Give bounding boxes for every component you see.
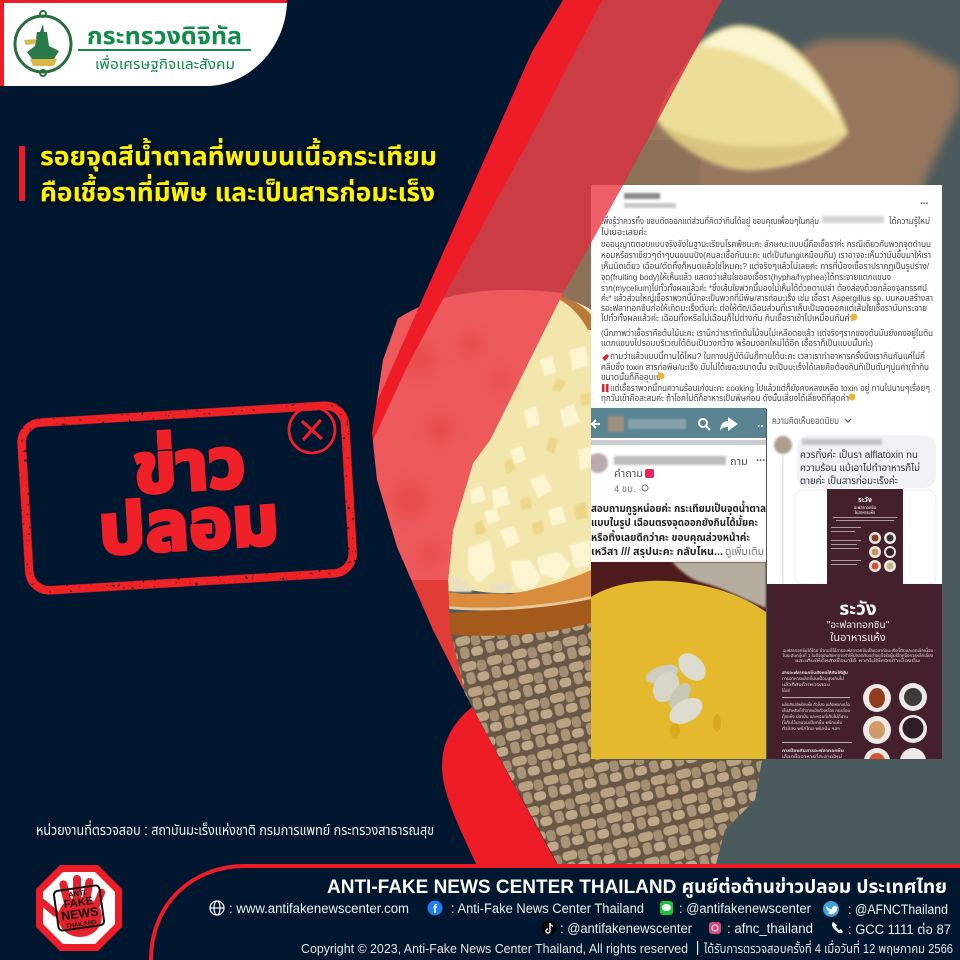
panel: navy background [0, 0, 563, 960]
poster small text: กุ้งแห้ง ปลาป่น และหอมที่เก็บไม่ดีนาน [782, 713, 848, 720]
post body text: ค่ะ* แล้วส่วนใหญ่เชื้อราพวกนี้มักจะเป็นพวกที่มีพิษ/สารก่อมะเร็ง เช่น เชื้อรา Aspergillus sp. บนหอมสร้างสา [601, 292, 933, 303]
poster small text: สารอะฟลาทอกซินยังคงให้กับให้ผู้บ [782, 669, 848, 676]
footer contacts row 1: : www.antifakenewscenter.com [229, 901, 409, 916]
footer contacts row 1: : @antifakenewscenter [679, 901, 811, 916]
question text: สอบถามกูรูหน่อยค่ะ กระเทียมเป็นจุดน้ำตาล [591, 500, 766, 515]
photo background: garlic on burlap [448, 0, 960, 864]
poster food photos [863, 683, 927, 759]
diagonal band: solid red [360, 0, 602, 440]
footer title: ANTI-FAKE NEWS CENTER THAILAND ศูนย์ต่อต้านข่าวปลอม ประเทศไทย [327, 876, 947, 898]
question text: แบบในรูป เฉือนตรงจุดออกยังกินได้มั้ยคะ [591, 514, 758, 529]
footer contacts row 1: : @AFNCThailand [848, 902, 948, 917]
comment text: ตายค่ะ เป็นสารก่อมะเร็งค่ะ [800, 474, 898, 487]
poster small text: ถั่วลิสง พริกไทย พริกป่น ฯลฯ [782, 725, 840, 731]
blurred group name [608, 416, 686, 432]
post body text: คลีบซึ่ง toxin สารก่อพิษ/มะเร็ง มันไม่ได้เยอะขนาดนั้น จะเป็นมะเร็งได้เลยคือต้องกินทีเป็นตันๆนู่นค่า(ถ้ากิน [601, 361, 929, 373]
blurred burlap backdrop [562, 34, 960, 296]
app bar [591, 408, 766, 438]
post body text: ขออนุญาตตอบแบบจริงจังในฐานะเรียนโรคพืชนะคะ ลักษณะแบบนี้คือเชื้อราค่ะ กรณีเดียวกับพวกจุดดำบน [601, 238, 931, 249]
icon: garlic clove [652, 25, 848, 170]
poster thumbnail: ระวัง [858, 496, 872, 504]
post body text: แต่เชื้อราพวกนี้ทนความร้อนเก่งนะคะ cooking ไปแล้วแต่ก็ยังคงหลงเหลือ toxin อยู่ ทานไปนานๆเรื่อยๆ [610, 382, 930, 394]
stamp text: THAILAND [66, 920, 98, 930]
poster thumbnail [827, 489, 903, 584]
post body text: ไปเยอะเลยค่ะ [600, 227, 647, 237]
poster small text: ในระดับกลุ่มที่ 1 ในปัจจุบันยังหาทางทำให้ปลอดภัยอย่างแท้จริงผู้บริโภคจึงควรหลีกเลี่ยง [783, 652, 934, 659]
post body text: เห็นนิดเดียว เฉือน/ตัดทิ้งก็หมดแล้วใช่ไหมคะ? แต่จริงๆแล้วไม่เลยค่ะ การที่น้องเชื้อราปรากฏเป็นรูปร่าง/ [601, 260, 930, 272]
poster small text: การป้องกันสารอะฟลาทอกซิน [782, 747, 844, 753]
icons: back, search, share, more [592, 419, 710, 430]
poster small text: ที่เก็บไว้นานจนเปียกชื้น พริกแห้ง [782, 719, 843, 725]
icon: more menu: ... [920, 196, 929, 207]
panel: left mobile screenshot [588, 408, 766, 759]
burlap cloth [440, 610, 762, 868]
source note: หน่วยงานที่ตรวจสอบ : สถาบันมะเร็งแห่งชาติ กรมการแพทย์ กระทรวงสาธารณสุข [36, 820, 434, 839]
question text: เหวีสา /// สรุปนะคะ กลับไหน... [591, 546, 723, 558]
red hand [37, 875, 106, 937]
question text [591, 500, 766, 558]
icon: tiktok [542, 920, 556, 936]
panel: aflatoxin warning poster: ในอาหารแห้ง [830, 632, 886, 644]
header: ministry logo plate [0, 0, 287, 86]
panel: left mobile screenshot: .. [757, 416, 764, 430]
post meta: 4 ชม. · [614, 484, 641, 495]
tinted bowl [372, 580, 464, 690]
icon: facebook [428, 900, 442, 916]
post body text: ขนาดนั้นก็คืออุบเบ้ [601, 371, 661, 382]
post body text: รอะฟลาทอกซินก่อให้เกิดมะเร็งตับค่ะ ต่อให้ตัด/เฉือนส่วนที่เราเห็นเป็นจุดออกแต่เส้นใยเชื้อรามันกระจาย [601, 302, 927, 313]
footer contacts row 1: : GCC 1111 ต่อ 87 [848, 921, 951, 937]
blurred author [588, 453, 726, 473]
icon: line [660, 901, 673, 915]
post meta: ถาม [730, 456, 748, 468]
post body text: ทุกวันเข้าคือสะสมค่ะ ถ้าโชคไม่ดีก็อาหารเป็นพิษก่อน ดังนั้นเลี่ยงได้เลี่ยงดีที่สุดค่า [601, 392, 849, 403]
panel: aflatoxin warning poster: "อะฟลาทอกซิน" [827, 620, 890, 631]
question text: ดูเพิ่มเติม [725, 544, 764, 558]
comment text: ควรทิ้งค่ะ เป็นรา alflatoxin ทน [800, 448, 918, 461]
comment text [800, 448, 920, 487]
icon: facebook: f [433, 902, 438, 916]
tinted clove [652, 42, 700, 130]
icon: ministry emblem [15, 11, 71, 76]
tinted garlic mound [372, 290, 563, 600]
poster small text: เส้นสำหรับที่ทำจากแป้งถั่วเหลือง กระเทียม [782, 707, 850, 713]
footer contacts row 1: : Anti-Fake News Center Thailand [451, 901, 644, 916]
question text: หรือทิ้งเลยดีกว่าคะ ขอบคุณล่วงหน้าค่ะ [591, 530, 750, 544]
panel: facebook post screenshot [588, 185, 942, 774]
ministry name: กระทรวงดิจิทัล [87, 23, 242, 50]
post body text: ราก(mycelium)ไปทั่วทั้งผลแล้วค่ะ *ซึ่งเส้นใยพวกนี้มองไม่เห็นได้ด้วยตาเปล่า ต้องส่องด้วยกล้องจุลทรรศน์ [601, 282, 927, 293]
heading: คือเชื้อราที่มีพิษ และเป็นสารก่อมะเร็ง [40, 174, 435, 207]
emoji marks [602, 314, 858, 400]
post meta [614, 459, 764, 492]
post body text: (นึกภาพว่าเชื้อราคือต้นไม้นะคะ เรานึกว่าเราตัดต้นไม้จนไม่เหลือตอแล้ว แต่จริงๆรากของต้นมันยังคงอยู่ในดิน [601, 327, 933, 339]
stamp text [93, 422, 281, 569]
poster small text: อะฟลาทอกซินได้โดย ถ้าคนที่ได้สารอะฟลาทอกซินเป็นเวลาก่อมะเร็งที่ตับและยกเลิกเนื่อง [783, 647, 934, 653]
post body text: ไปทั่วทั้งผลแล้วค่ะ เฉือนทิ้งหรือไม่เฉือนก็ไม่ต่างกัน กินเชื้อราเข้าไปเหมือนกันค่า [600, 312, 853, 323]
diagonal band: red tinted overlay [340, 0, 722, 690]
stamp text: ปลอม [97, 481, 281, 569]
footer panel [0, 864, 960, 960]
poster small text: เลือกซื้ออาหารที่สะอาดใหม่ [782, 753, 842, 759]
post body text: จุด(fruiting body)ให้เห็นแล้ว แสดงว่าเส้นใยของเชื้อรา(hypha/hyphea)ได้กระจายแตกแขนง [601, 271, 891, 282]
footer copyright: Copyright © 2023, Anti-Fake News Center Thailand, All rights reserved [301, 942, 688, 956]
icon: phone [832, 922, 843, 933]
red curved accent [442, 707, 557, 864]
stamp text: NEWS [60, 904, 99, 923]
post body text [600, 215, 933, 403]
post body text: เพิ่งรู้ว่าควรทิ้ง ชอบตัดออกแต่ส่วนที่คิดว่ากินได้อยู่ ขอบคุณเพื่อนๆในกลุ่ม [601, 215, 819, 227]
poster small text: และเก็บให้ดีหลังซื้อมาได้ หากไม่ใช้ควรทำเบื้องต้น [795, 657, 920, 663]
stamp text [53, 885, 105, 931]
poster title: ระวัง [839, 599, 877, 620]
icon: globe [210, 901, 224, 915]
stamp text: ANTI [68, 888, 86, 899]
footer contacts row 1 [229, 901, 951, 937]
post body text: ถามว่าแล้วแบบนี้ทานได้ไหม? ในทางปฏิบัติมันก็ทานได้นะคะ เวลาเราทำอาหารครั้งนึงเรากินกันแค่ไม่กี่ [610, 350, 925, 361]
blurred poster name [624, 193, 884, 223]
footer contacts row 2: : @antifakenewscenter [560, 921, 692, 936]
poster small text: ผลิตภัณฑ์พริกแห้ง ถั่วลิสง เมล็ดพอกเกลือ [782, 701, 850, 707]
stamp: fake news [20, 405, 354, 591]
heading [19, 138, 437, 207]
poster small text [781, 647, 934, 759]
icon: anti fake news octagon logo [36, 865, 122, 951]
post meta: ... [756, 452, 765, 464]
icon: twitter [823, 901, 839, 917]
wooden bowl [448, 570, 591, 636]
post meta: คำถาม [614, 468, 643, 480]
icon: close circle [288, 406, 336, 454]
post body text: หอมหรือราเขียวๆดำๆบนขนมปัง(คนละเชื้อกันนะคะ แต่เป็นfungiเหมือนกัน) เราอาจจะเห็นว่ามันขึ้นมาให้เรา [601, 249, 931, 260]
minced garlic mound [448, 298, 591, 594]
ministry tagline: เพื่อเศรษฐกิจและสังคม [95, 54, 235, 72]
post body text: แตกแขนงไปรอบบริเวณใต้ดินเป็นวงกว้าง พร้อมงอกใหม่ได้อีก เชื้อราก็เป็นแบบนั้นค่ะ) [601, 337, 873, 348]
comment text: ความร้อน แม้เอาไปทำอาหารก็ไม่ [800, 461, 920, 474]
blotches [392, 333, 510, 567]
panel: aflatoxin warning poster [767, 584, 942, 774]
stamp text: ข่าว [131, 424, 247, 508]
poster small text: แล้วก็ยังถ้าตรวจสอบ [782, 681, 830, 687]
poster small text: ทานอาหารผลิตที่ปนเปื้อนสูงเกินไป [782, 675, 844, 682]
icon: instagram [709, 922, 721, 934]
heading: รอยจุดสีน้ำตาลที่พบบนเนื้อกระเทียม [40, 138, 437, 172]
poster small text: ได้แก่ [781, 687, 790, 693]
tinted post corner [591, 185, 623, 243]
stamp text: FAKE [63, 895, 94, 911]
panel: comment column [767, 408, 942, 585]
poster thumbnail: ในอาหารแห้ง [855, 510, 875, 515]
photo: yellow board with garlic [591, 562, 766, 759]
footer contacts row 1: : afnc_thailand [727, 921, 813, 936]
poster thumbnail: อะฟลาทอกซิน [854, 505, 877, 510]
comment bubble [797, 435, 936, 488]
post body text: ได้ความรู้ใหม่ [888, 216, 930, 227]
comment header: ความคิดเห็นยอดนิยม [772, 416, 839, 427]
